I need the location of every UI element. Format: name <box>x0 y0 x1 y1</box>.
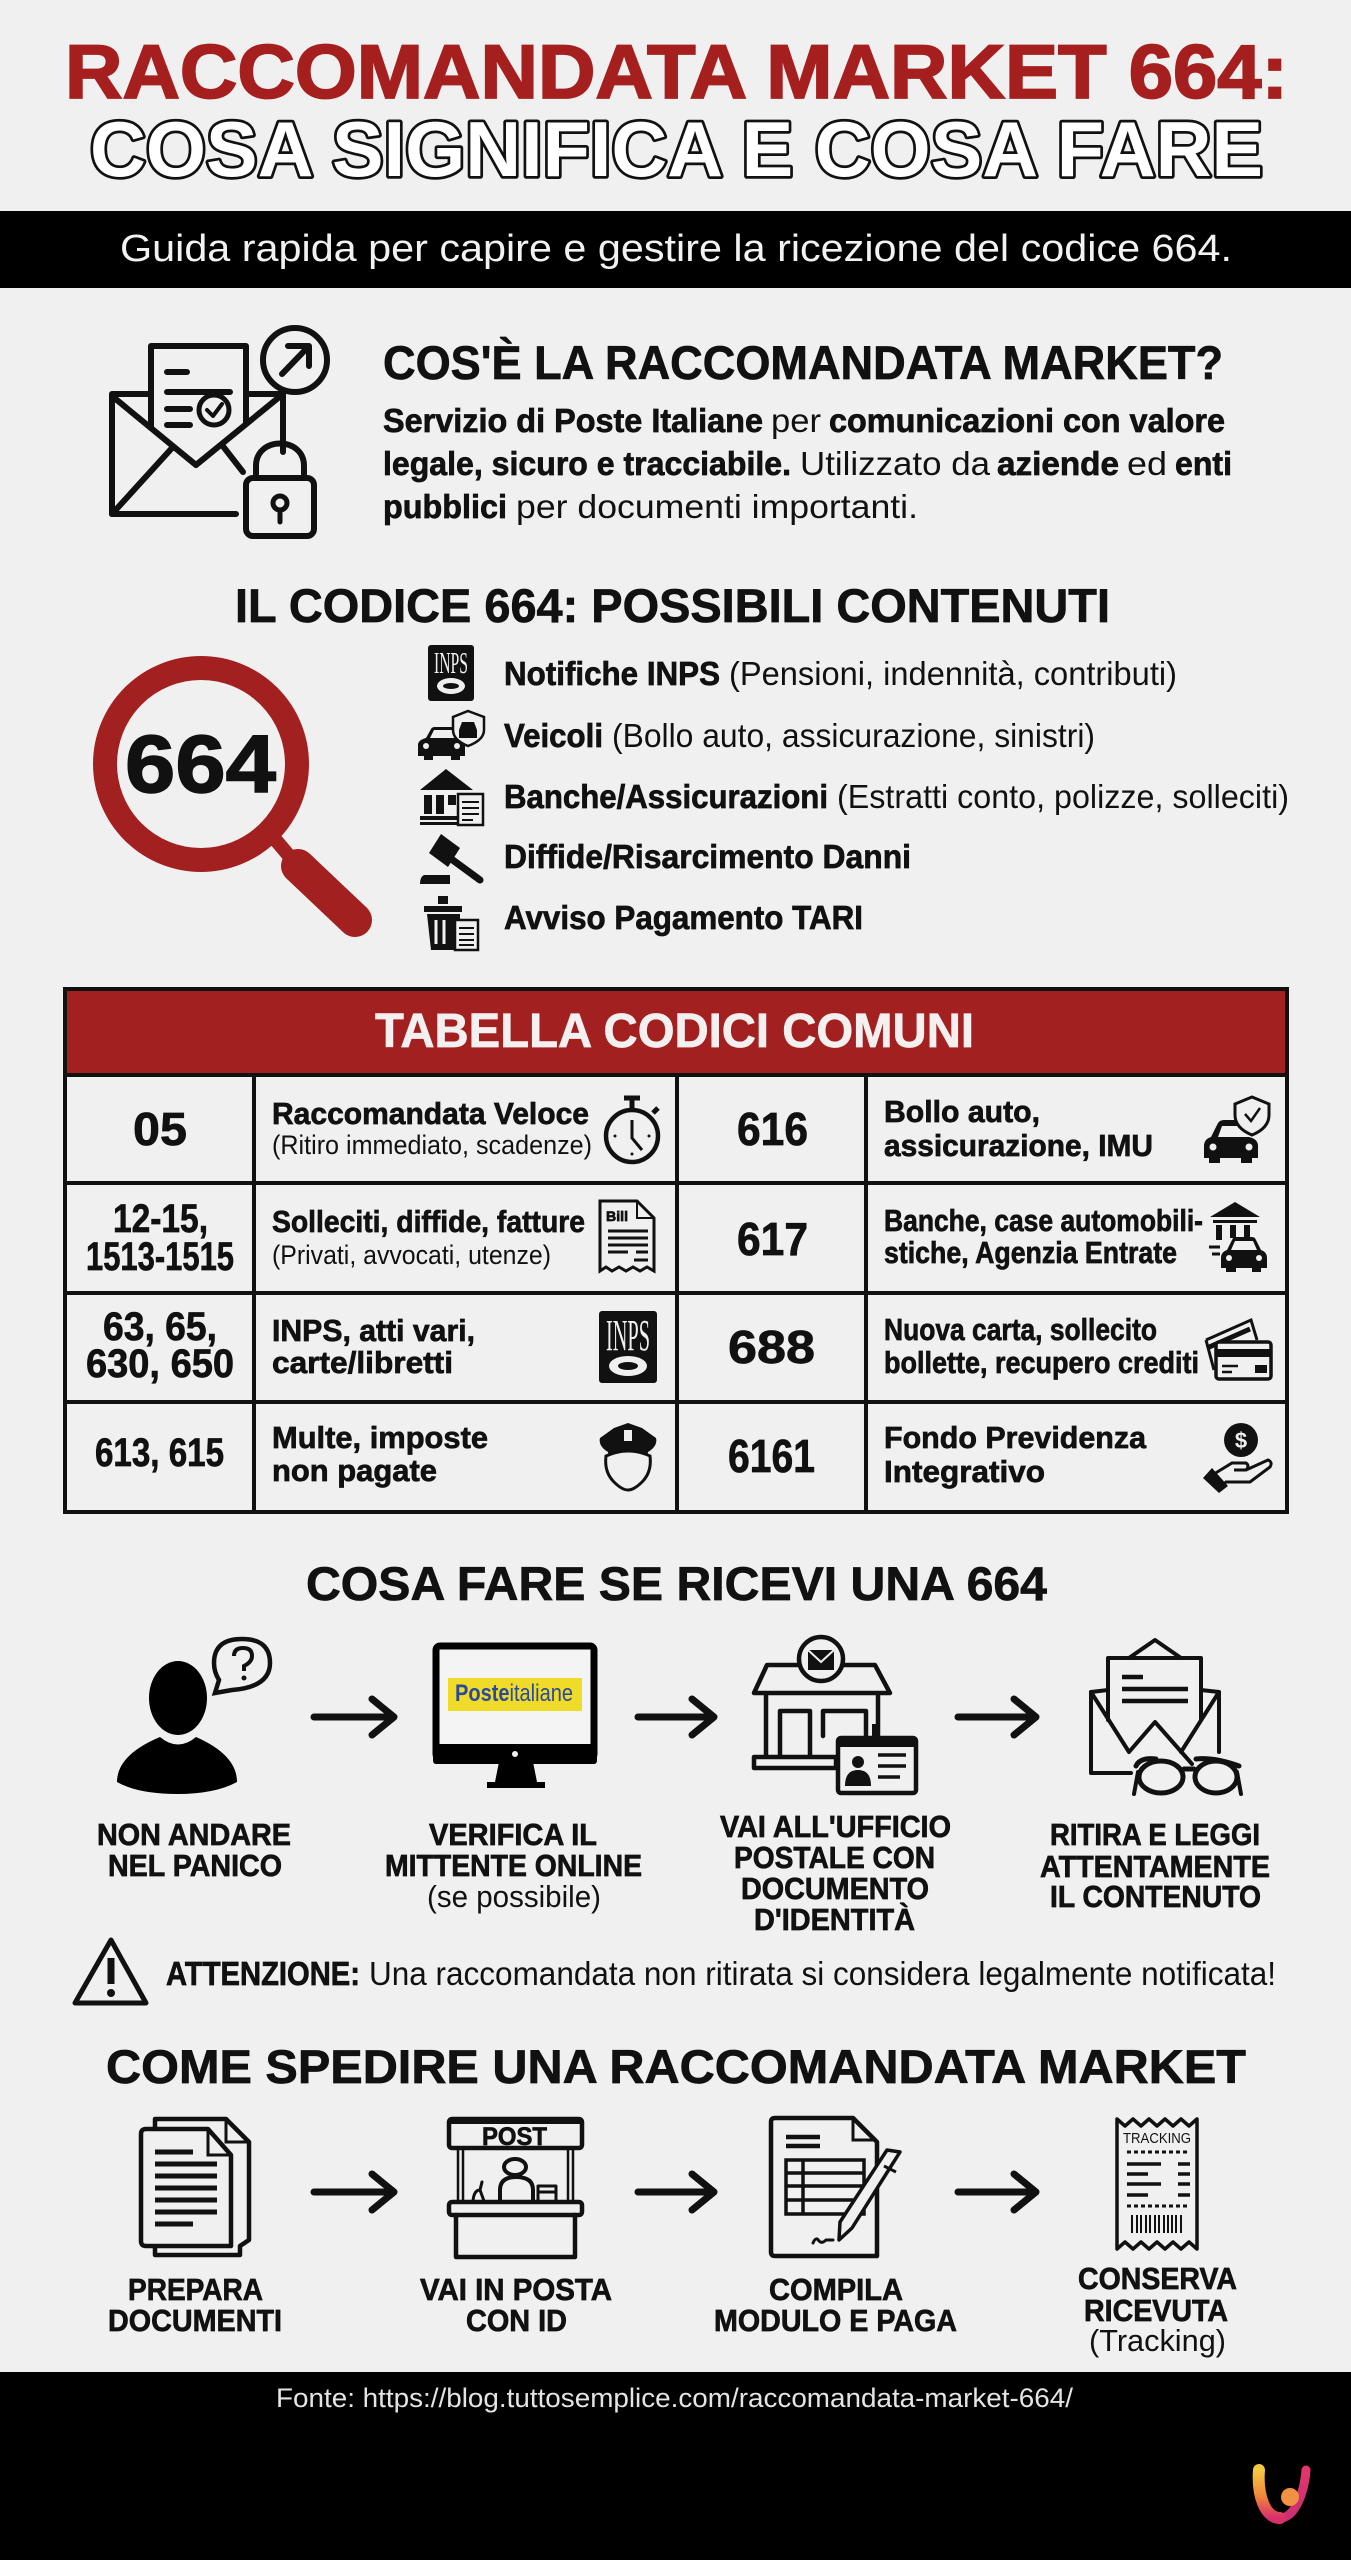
row 4 left: 613, 615 <box>95 1431 224 1475</box>
step 3: ufficio postale: D'IDENTITÀ <box>754 1902 915 1937</box>
row 3 right: 688 <box>728 1321 815 1373</box>
list item: diffide: Diffide/Risarcimento Danni <box>504 838 911 875</box>
table header <box>65 990 1287 1075</box>
row 4 right: 6161 <box>728 1430 815 1482</box>
icon: magnifying glass <box>105 668 355 920</box>
step 4: conserva ricevuta: CONSERVA <box>1078 2261 1237 2296</box>
step 3: ufficio postale: VAI ALL'UFFICIO <box>720 1809 951 1844</box>
icon: car and shield <box>1204 1097 1269 1163</box>
list item: INPS: INPS <box>434 645 468 680</box>
title <box>65 30 1288 193</box>
heading: COS'È LA RACCOMANDATA MARKET? <box>383 336 1223 389</box>
row 2 right: 617 <box>737 1213 808 1265</box>
text block: legale, sicuro e tracciabile. <box>383 445 791 482</box>
panel: come spedire <box>106 2040 1246 2358</box>
title: COSA SIGNIFICA E COSA FARE <box>90 105 1263 193</box>
row 2 left: Solleciti, diffide, fatture <box>272 1204 585 1239</box>
icon: bill <box>600 1201 654 1271</box>
text block: Utilizzato da <box>800 445 991 482</box>
step 3: compila modulo <box>714 2118 957 2338</box>
row 3 left: 630, 650 <box>86 1342 234 1386</box>
step 4: ritira e leggi: RITIRA E LEGGI <box>1050 1817 1260 1852</box>
row 1 right: assicurazione, IMU <box>884 1128 1153 1163</box>
list item: diffide <box>420 834 911 884</box>
step 4: conserva ricevuta <box>1078 2119 1237 2358</box>
row 1 right: Bollo auto, <box>884 1094 1040 1129</box>
list item: veicoli <box>418 711 1095 760</box>
step 2: verifica il mittente: (se possibile) <box>427 1879 601 1914</box>
list item: veicoli: Veicoli <box>504 717 603 754</box>
callout: attenzione <box>75 1940 1276 2003</box>
step 1: non andare nel panico: NEL PANICO <box>108 1848 282 1883</box>
step 2: vai in posta: CON ID <box>466 2303 567 2338</box>
row 4 left <box>95 1420 656 1490</box>
arrow <box>958 2174 1036 2210</box>
step 1: prepara documenti: PREPARA <box>128 2272 263 2307</box>
callout: attenzione: ATTENZIONE: <box>166 1955 360 1992</box>
row 3 right: bollette, recupero crediti <box>884 1345 1199 1380</box>
title: RACCOMANDATA MARKET 664: <box>65 30 1288 115</box>
source text: Fonte: https://blog.tuttosemplice.com/raccomandata-market-664/ <box>276 2383 1074 2413</box>
panel: cos'è la raccomandata market <box>112 328 1232 536</box>
heading: COSA FARE SE RICEVI UNA 664 <box>306 1557 1047 1610</box>
row 1 left <box>133 1096 658 1162</box>
row 4 right: Integrativo <box>884 1454 1045 1489</box>
footer <box>0 2372 1351 2560</box>
step 4: ritira e leggi: ATTENTAMENTE <box>1040 1849 1270 1884</box>
icon: police officer <box>600 1423 656 1490</box>
row 3 left: 63, 65, <box>103 1305 217 1349</box>
step 2: verifica il mittente <box>385 1646 642 1914</box>
step 4: conserva ricevuta: TRACKING <box>1123 2130 1191 2147</box>
icon: envelope with lock <box>112 328 327 536</box>
text block: Servizio di Poste Italiane <box>383 402 763 439</box>
step 3: ufficio postale <box>720 1637 951 1937</box>
step 3: ufficio postale: POSTALE CON <box>734 1840 935 1875</box>
row 4 right <box>728 1420 1271 1493</box>
step 3: ufficio postale: DOCUMENTO <box>741 1871 929 1906</box>
row 2 left <box>86 1197 654 1279</box>
list item: veicoli: (Bollo auto, assicurazione, sinistri) <box>612 717 1095 754</box>
subtitle band: Guida rapida per capire e gestire la ricezione del codice 664. <box>120 228 1232 270</box>
step 2: vai in posta <box>420 2119 612 2338</box>
list item: INPS: (Pensioni, indennità, contributi) <box>729 655 1177 692</box>
row 1 left: Raccomandata Veloce <box>272 1096 589 1131</box>
step 4: ritira e leggi <box>1040 1640 1270 1914</box>
row 1 right <box>737 1094 1269 1163</box>
row 1 right: 616 <box>737 1103 808 1155</box>
row 3 left: carte/libretti <box>272 1345 453 1380</box>
row 2 left: (Privati, avvocati, utenze) <box>272 1240 551 1270</box>
step 1: non andare nel panico: NON ANDARE <box>97 1817 291 1852</box>
icon: bank and car <box>1209 1202 1267 1272</box>
row 2 right: Banche, case automobili- <box>884 1203 1203 1238</box>
callout: attenzione: Una raccomandata non ritirata si considera legalmente notificata! <box>369 1955 1276 1992</box>
icon: INPS: INPS <box>606 1311 650 1360</box>
icon: bill: Bill <box>606 1208 628 1224</box>
icon: INPS <box>599 1311 657 1383</box>
subtitle band <box>0 211 1351 288</box>
arrow <box>314 1699 394 1735</box>
text block <box>383 402 1232 525</box>
icon: hand with coin: $ <box>1235 1428 1247 1453</box>
list item: TARI <box>424 896 863 950</box>
list item: banche: Banche/Assicurazioni <box>504 778 828 815</box>
step 4: conserva ricevuta: (Tracking) <box>1089 2323 1226 2358</box>
icon: hand with coin <box>1203 1423 1271 1493</box>
panel: cosa fare se ricevi una 664 <box>75 1557 1276 2003</box>
text block: per <box>771 402 821 439</box>
step 2: verifica il mittente: VERIFICA IL <box>429 1817 597 1852</box>
list item: INPS <box>428 645 1177 701</box>
text block: comunicazioni con valore <box>829 402 1225 439</box>
heading: IL CODICE 664: POSSIBILI CONTENUTI <box>235 579 1110 632</box>
text block: per documenti importanti. <box>516 488 918 525</box>
step 2: vai in posta: VAI IN POSTA <box>420 2272 612 2307</box>
step 1: non andare nel panico <box>97 1639 291 1883</box>
list item: banche <box>420 769 1289 825</box>
row 4 left: non pagate <box>272 1453 437 1488</box>
table header: TABELLA CODICI COMUNI <box>375 1005 974 1058</box>
row 3 left <box>86 1305 657 1386</box>
list item: banche: (Estratti conto, polizze, solleciti) <box>837 778 1289 815</box>
step 4: conserva ricevuta: RICEVUTA <box>1084 2293 1228 2328</box>
heading: COME SPEDIRE UNA RACCOMANDATA MARKET <box>106 2040 1246 2093</box>
row 2 right: stiche, Agenzia Entrate <box>884 1235 1177 1270</box>
icon: stopwatch <box>606 1098 658 1162</box>
table: tabella codici comuni <box>65 989 1287 1512</box>
step 2: verifica il mittente: MITTENTE ONLINE <box>385 1848 642 1883</box>
row 3 right: Nuova carta, sollecito <box>884 1312 1157 1347</box>
icon: credit cards <box>1206 1320 1271 1379</box>
row 3 left: INPS, atti vari, <box>272 1313 475 1348</box>
list item: INPS: Notifiche INPS <box>504 655 720 692</box>
row 4 left: Multe, imposte <box>272 1420 488 1455</box>
step 3: compila modulo: COMPILA <box>769 2272 903 2307</box>
text block: pubblici <box>383 488 507 525</box>
list item: TARI: Avviso Pagamento TARI <box>504 899 863 936</box>
text block: ed <box>1127 445 1167 482</box>
panel: il codice 664 <box>105 579 1289 950</box>
row 4 right: Fondo Previdenza <box>884 1420 1147 1455</box>
icon: magnifying glass: 664 <box>125 719 276 810</box>
arrow <box>314 2174 394 2210</box>
step 2: verifica il mittente: Posteitaliane <box>455 1680 573 1707</box>
row 1 left: (Ritiro immediato, scadenze) <box>272 1130 592 1160</box>
step 1: prepara documenti: DOCUMENTI <box>108 2303 282 2338</box>
row 1 left: 05 <box>133 1103 187 1155</box>
icon: logo <box>1258 2470 1306 2518</box>
arrow <box>638 2174 714 2210</box>
text block: enti <box>1175 445 1232 482</box>
row 2 right <box>737 1202 1267 1272</box>
row 2 left: 12-15, <box>113 1197 208 1241</box>
arrow <box>638 1699 714 1735</box>
step 4: ritira e leggi: IL CONTENUTO <box>1050 1879 1261 1914</box>
row 2 left: 1513-1515 <box>86 1235 234 1279</box>
text block: aziende <box>997 445 1119 482</box>
step 1: prepara documenti <box>108 2119 282 2338</box>
row 3 right <box>728 1312 1271 1380</box>
arrow <box>958 1699 1036 1735</box>
step 3: compila modulo: MODULO E PAGA <box>714 2303 957 2338</box>
step 2: vai in posta: POST <box>482 2123 547 2151</box>
